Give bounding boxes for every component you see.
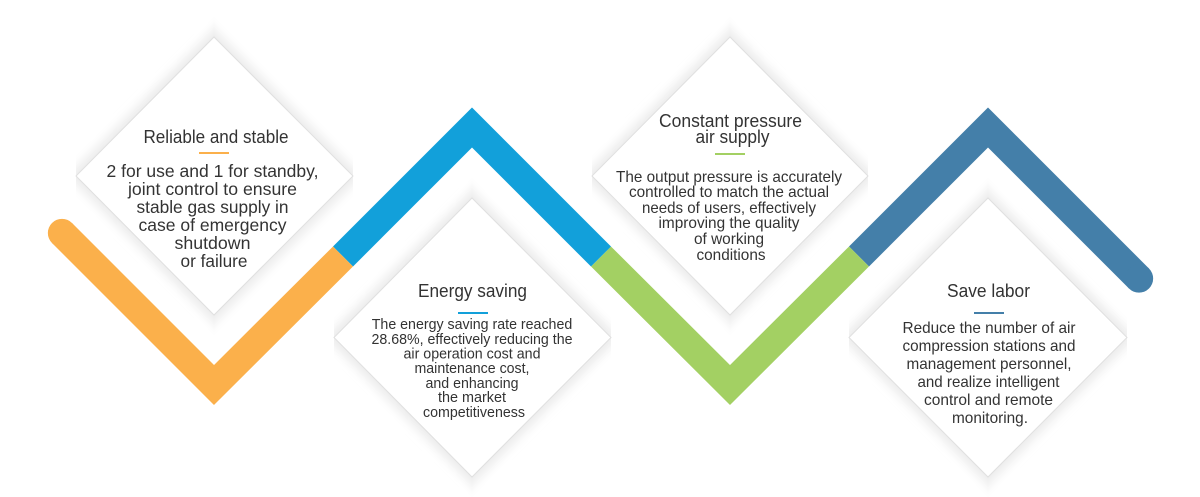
accent rule: green [715, 153, 745, 155]
text block: constant pressure air supply: controlled to match the actual [629, 184, 829, 201]
ribbon segment: steel blue [859, 128, 1139, 278]
text block: constant pressure air supply: The output pressure is accurately [616, 169, 842, 186]
accent rule: orange [199, 152, 229, 154]
panel: reliable and stable [76, 29, 353, 323]
text block: save labor: compression stations and [902, 338, 1076, 355]
text block: constant pressure air supply: improving the quality [658, 215, 800, 232]
text block: reliable and stable: 2 for use and 1 for standby, [106, 161, 318, 181]
text block: constant pressure air supply: of working [694, 231, 764, 248]
text block: reliable and stable: shutdown [174, 233, 250, 253]
heading: reliable and stable: Reliable and stable [144, 127, 288, 147]
text block: energy saving: competitiveness [423, 405, 525, 421]
panel: save labor [849, 190, 1127, 485]
text block: energy saving: maintenance cost, [414, 361, 530, 377]
accent rule: blue [458, 312, 488, 314]
text block: reliable and stable: case of emergency [138, 215, 287, 235]
text block: energy saving: 28.68%, effectively reducing the [372, 332, 572, 348]
text block: save labor: management personnel, [906, 356, 1072, 373]
text block: save labor: control and remote [924, 392, 1053, 409]
text block: constant pressure air supply: conditions [696, 247, 766, 264]
text block: reliable and stable: joint control to ensure [127, 179, 297, 199]
zigzag ribbon [48, 128, 1153, 385]
text block: energy saving: the market [438, 390, 507, 406]
ribbon end cap: orange [48, 219, 76, 247]
text block: constant pressure air supply [616, 169, 842, 264]
panel: energy saving [334, 190, 611, 485]
ribbon segment: orange [62, 233, 343, 385]
text block: constant pressure air supply: needs of users, effectively [642, 200, 816, 217]
text block: reliable and stable: or failure [180, 251, 248, 271]
heading: constant pressure air supply: Constant pressure [659, 111, 802, 131]
text block: save labor: Reduce the number of air [902, 320, 1076, 337]
text block: save labor [902, 320, 1076, 427]
text block: energy saving: and enhancing [426, 376, 518, 392]
heading: save labor: Save labor [947, 281, 1030, 301]
text block: save labor: monitoring. [952, 410, 1028, 427]
text block: reliable and stable: stable gas supply in [136, 197, 288, 217]
ribbon segment: green [601, 256, 859, 385]
accent rule: steel blue [974, 312, 1004, 314]
text block: energy saving: The energy saving rate reached [372, 317, 572, 333]
ribbon end cap: steel blue [1125, 264, 1153, 293]
heading: energy saving: Energy saving [418, 281, 527, 301]
ribbon segment: blue [343, 128, 601, 256]
heading: constant pressure air supply [659, 111, 802, 147]
text block: save labor: and realize intelligent [918, 374, 1060, 391]
text block: energy saving: air operation cost and [404, 346, 540, 362]
text block: reliable and stable [106, 161, 318, 271]
panel: constant pressure air supply [592, 29, 868, 323]
heading: constant pressure air supply: air supply [696, 127, 770, 147]
text block: energy saving [372, 317, 572, 421]
